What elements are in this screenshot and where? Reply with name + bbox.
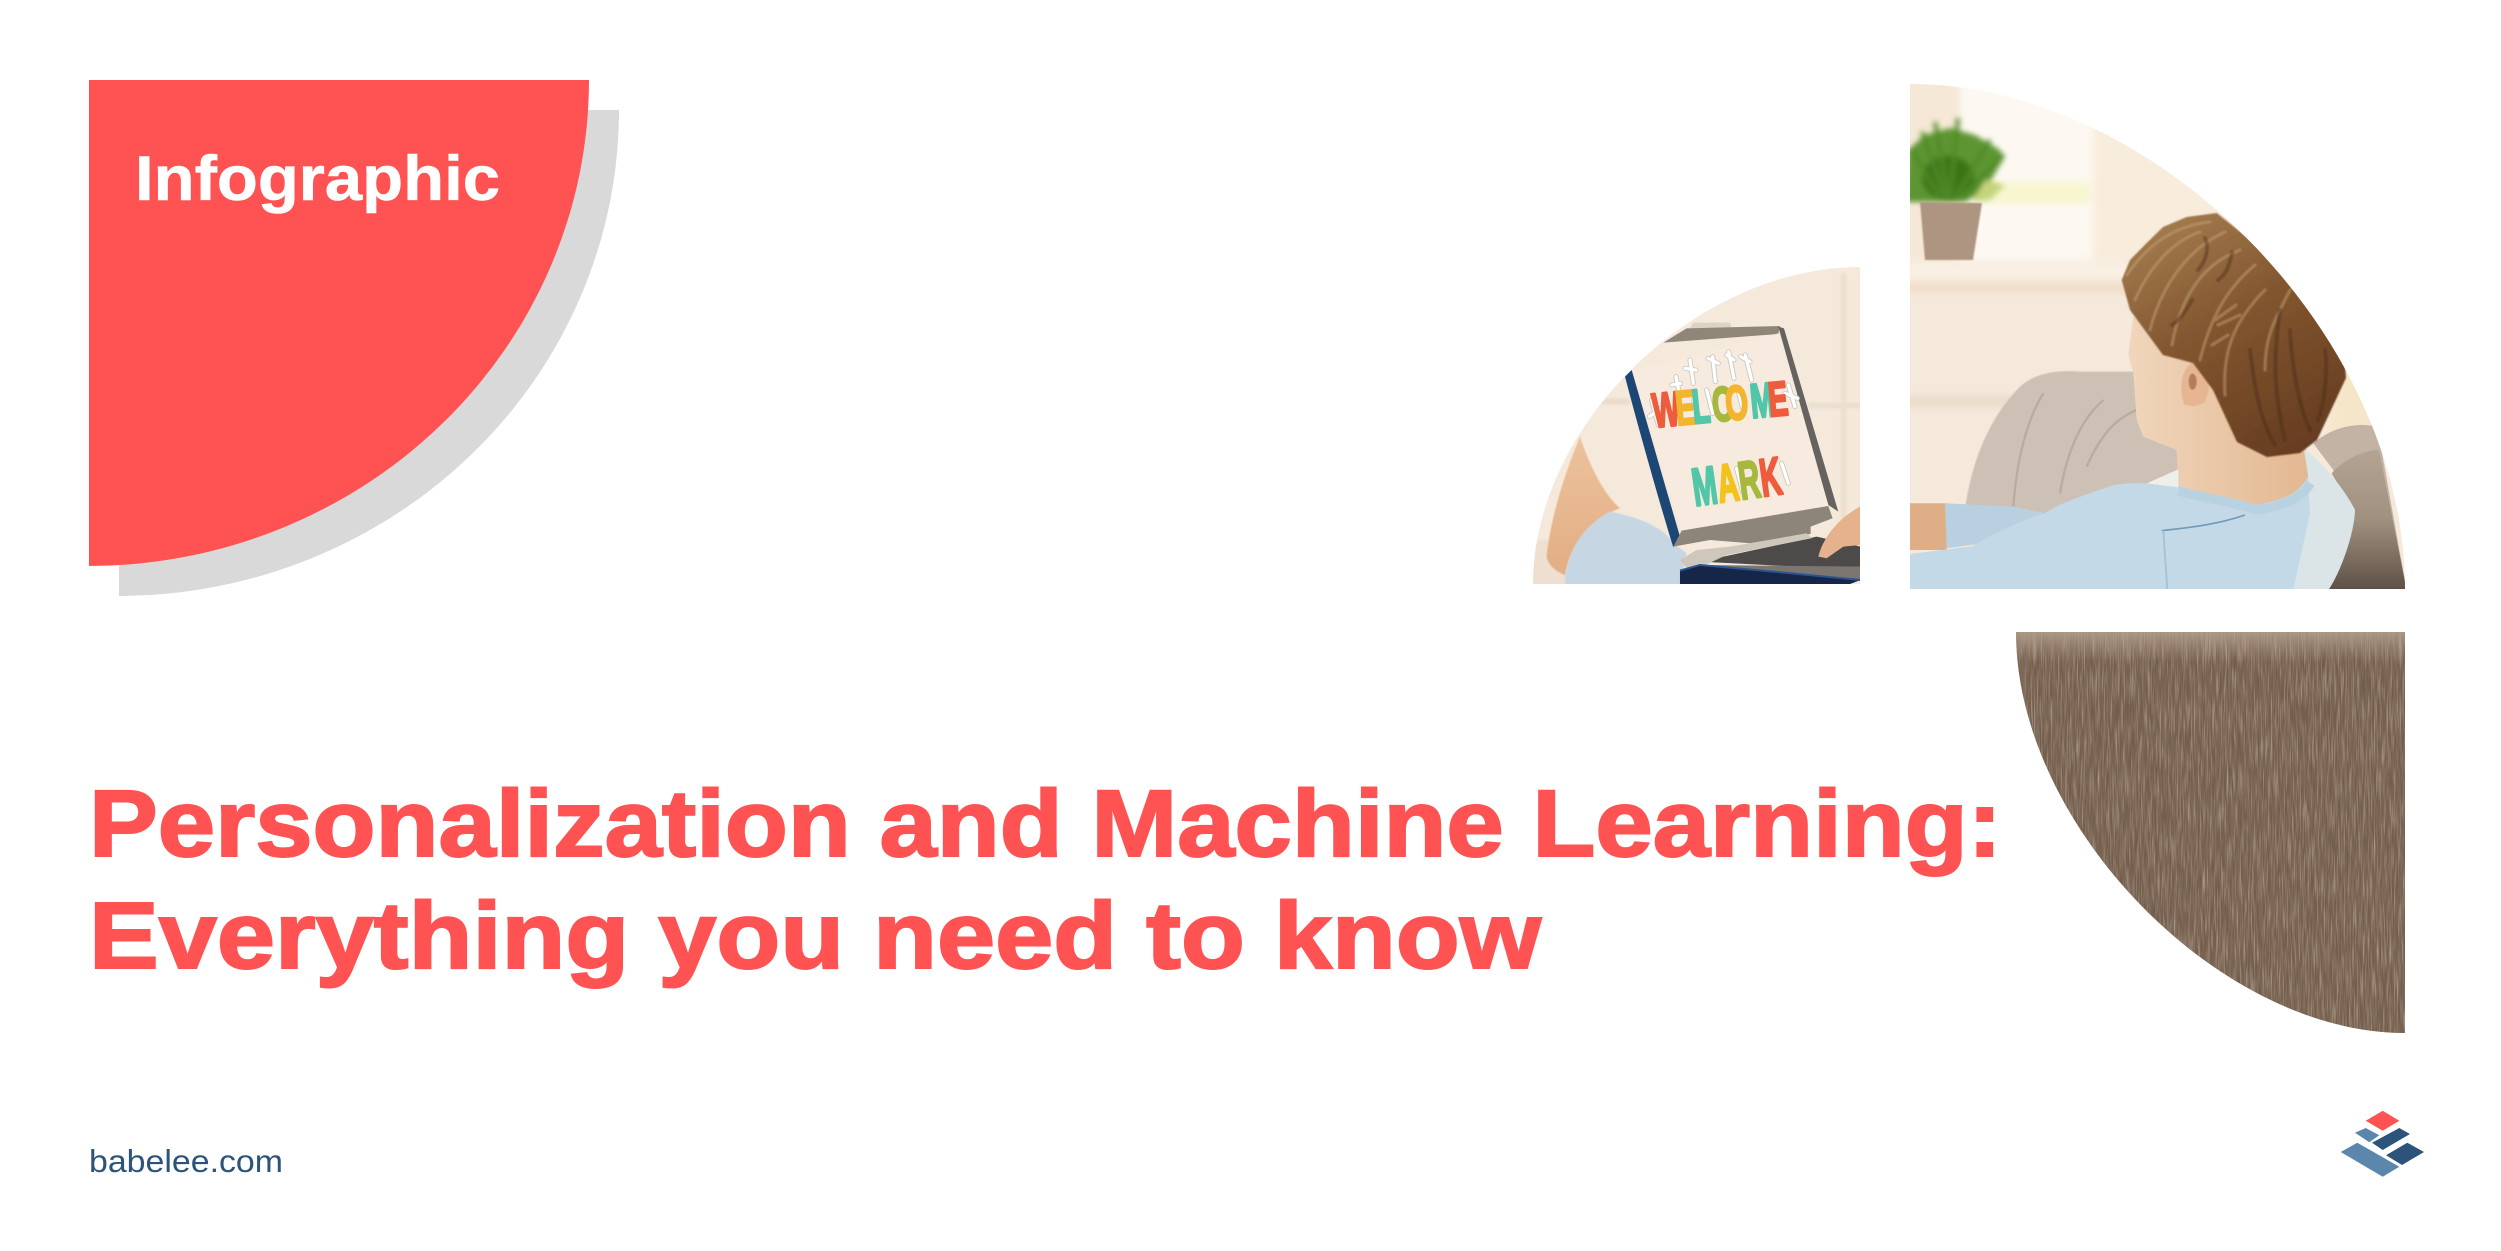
jeans (1565, 512, 1687, 585)
badge shadow (119, 110, 619, 596)
wall (1530, 260, 1863, 587)
ear (2181, 362, 2209, 406)
laptop (1625, 323, 1861, 585)
icon: babelee logo (2341, 1111, 2424, 1177)
photo: man on sofa (1900, 70, 2420, 600)
sweater (1910, 450, 2355, 590)
panel: infographic badge (89, 80, 619, 596)
neck and face (2128, 317, 2308, 507)
photo: sofa fabric (2010, 628, 2410, 1038)
badge label: Infographic (135, 144, 500, 214)
screen text: welcome: WELCOME (1650, 372, 1790, 438)
forearm (1910, 503, 1947, 550)
website url: babelee.com (89, 1143, 283, 1179)
flower pot (1920, 202, 1982, 260)
title: Personalization and Machine Learning: (89, 771, 2002, 877)
sofa arm (2313, 425, 2407, 590)
foot (1547, 437, 1620, 575)
sleeve (1945, 503, 2045, 548)
plant (1905, 118, 2005, 202)
sofa back (1964, 371, 2180, 517)
photo: person with laptop screen (1530, 260, 1863, 587)
badge quarter circle (89, 80, 589, 566)
room background (1910, 84, 2405, 580)
screen text: mark: MARK (1688, 447, 1785, 518)
title (89, 771, 2002, 989)
hair (2122, 213, 2346, 457)
title: Everything you need to know (89, 883, 1542, 989)
cartoon figures on screen (1649, 352, 1797, 492)
